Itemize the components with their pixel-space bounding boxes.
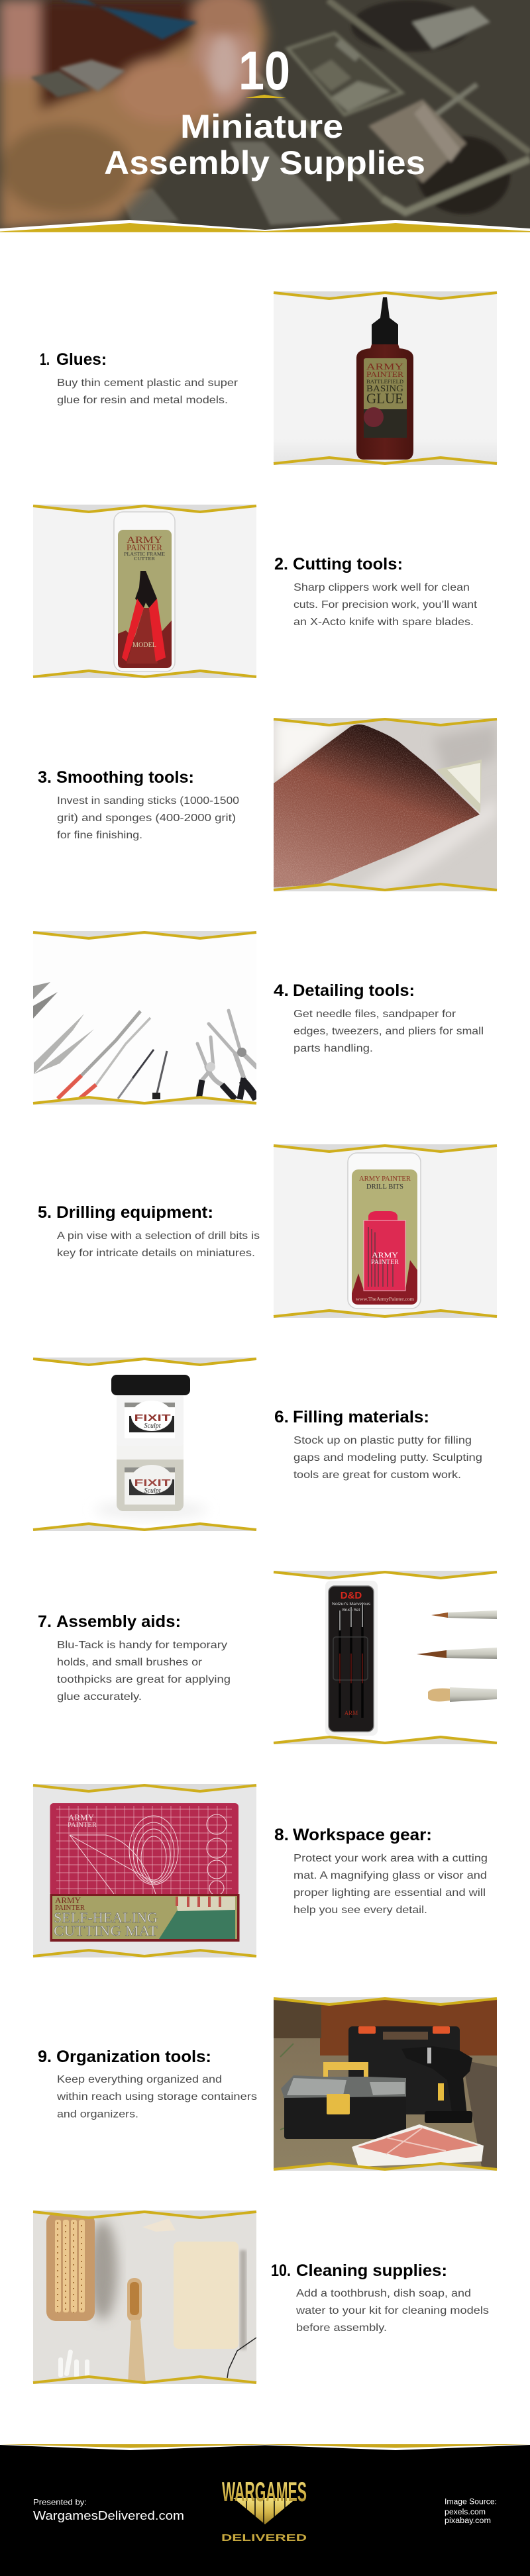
item 1 text: Glues [40,350,238,406]
item 8 text: Workspace gear: 8. [274,1826,289,1844]
item 9 text: Organization tools: 9. [38,2048,52,2066]
footer band [0,2445,530,2576]
item 4 text: Detailing tools: edges, tweezers, and pliers for small [293,1026,484,1037]
item 7 text: Assembly aids: toothpicks are great for applying [57,1674,231,1685]
item 5 image: drill bits package: www.TheArmyPainter.com [356,1297,415,1302]
item 10 text: Cleaning supplies: Add a toothbrush, dish soap, and [296,2288,471,2299]
item 9 text: Organization tools: Keep everything organized and [57,2074,222,2085]
item 1 image: basing glue bottle: BATTLEFIELD [366,379,403,385]
item 5 text: Drilling equipment: 5. [38,1203,52,1222]
item 8 image: cutting mat: SELF-HEALING [54,1909,158,1926]
item 8 text: Workspace gear: mat. A magnifying glass or visor and [293,1870,487,1881]
item 8 image: cutting mat: PAINTER [68,1822,97,1829]
item 10 image: brush, toothbrush and soap [33,2210,256,2384]
item 8 text: Workspace gear: proper lighting are essential and will [293,1887,486,1899]
item 1 image: basing glue bottle: GLUE [366,390,403,407]
item 1 text: Glues: Glues: [56,350,107,369]
item 5 image: drill bits package: DRILL BITS [366,1183,403,1191]
item 10 text: Cleaning supplies: 10. [271,2261,291,2280]
item 6 image: sculpting putty jars: FIXIT [134,1477,171,1489]
footer logo: Wargames Delivered [221,2476,307,2544]
item 6 text: Filling materials: 6. [274,1408,289,1426]
item 7 text: Assembly aids: holds, and small brushes or [57,1657,203,1668]
item 9 text: Organization tools [38,2048,257,2120]
item 9 text: Organization tools: within reach using storage containers [56,2091,257,2103]
title: Miniature Assembly Supplies [104,108,425,181]
footer chevron edge [0,2444,530,2448]
item 10 text: Cleaning supplies: before assembly. [296,2322,387,2334]
item 8 image: cutting mat [33,1784,256,1957]
item 4 text: Detailing tools: Get needle files, sandpaper for [293,1009,456,1020]
footer credit: presented by: Presented by: [33,2498,87,2507]
header banner photo [0,0,530,234]
item 10 text: Cleaning supplies: water to your kit for cleaning models [295,2305,489,2316]
item 7 image: brush set: Brush Set [343,1609,360,1612]
item 1 text: Glues: 1. [40,350,50,369]
item 8 text: Workspace gear: help you see every detail. [293,1905,427,1916]
item 2 image: plastic frame cutter [33,505,256,678]
item 2 image: plastic frame cutter: ARMY [127,535,162,546]
item 6 image: sculpting putty jars: FIXIT [134,1412,171,1424]
item 2 image: plastic frame cutter: CUTTER [134,556,155,562]
item 1 image: basing glue bottle: ARMY [366,362,403,372]
item 3 text: Smoothing tools: grit) and sponges (400-2000 grit) [57,813,236,824]
item 5 text: Drilling equipment: Drilling equipment: [56,1203,213,1222]
item 9 image: toolboxes and drill [274,1997,497,2171]
item 3 text: Smoothing tools [38,768,239,841]
item 4 image: detailing tools [33,931,256,1105]
item 2 text: Cutting tools: Cutting tools: [293,555,403,573]
header chevron edge [0,220,530,233]
item 5 image: drill bits package: ARMY PAINTER [359,1175,411,1183]
item 6 text: Filling materials [274,1408,482,1481]
item 8 text: Workspace gear [274,1826,488,1916]
item 6 text: Filling materials: tools are great for custom work. [293,1469,461,1481]
title accent chevron [245,95,286,98]
footer logo: Wargames Delivered: WARGAMES [222,2476,307,2507]
footer credit: presented by: WargamesDelivered.com [33,2508,184,2522]
item 5 image: drill bits package: ARMY [372,1250,398,1260]
item 7 text: Assembly aids: 7. [38,1612,52,1631]
item 1 image: basing glue bottle [274,291,497,465]
item 2 text: Cutting tools: cuts. For precision work, you’ll want [293,599,478,611]
item 3 text: Smoothing tools: Invest in sanding sticks (1000-1500 [57,795,239,807]
item 1 text: Glues: Buy thin cement plastic and super [57,377,238,389]
item 4 text: Detailing tools: 4. [274,981,289,1000]
item 4 text: Detailing tools: Detailing tools: [293,981,415,1000]
footer image sources: pixabay.com [445,2517,491,2525]
item 2 text: Cutting tools: an X-Acto knife with spare blades. [293,617,474,628]
item 3 image: sandpaper [274,718,497,891]
item 3 text: Smoothing tools: Smoothing tools: [56,768,194,787]
item 7 image: brush set: D&D [341,1590,362,1601]
item 6 text: Filling materials: Filling materials: [293,1408,429,1426]
item 2 text: Cutting tools: Sharp clippers work well for clean [293,582,470,593]
footer credit: presented by [33,2498,184,2522]
title: Miniature Assembly Supplies: Assembly Supplies [104,144,425,181]
item 3 text: Smoothing tools: 3. [38,768,52,787]
item 1 text: Glues: glue for resin and metal models. [57,395,228,406]
item 8 image: cutting mat: ARMY [55,1895,81,1905]
item 5 text: Drilling equipment [38,1203,260,1259]
item 7 image: brush set: ARM [344,1710,358,1716]
title: Miniature Assembly Supplies: Miniature [180,108,343,145]
item 7 text: Assembly aids: Blu-Tack is handy for temporary [57,1640,227,1651]
footer logo: Wargames Delivered: DELIVERED [221,2533,307,2544]
item 6 text: Filling materials: Stock up on plastic putty for filling [293,1435,472,1446]
item 2 image: plastic frame cutter: MODEL [132,642,156,649]
footer image sources [445,2498,497,2525]
item 6 image: sculpting putty jars: Sculpt [144,1487,161,1495]
footer image sources: Image Source: [445,2498,497,2506]
item 1 image: basing glue bottle: BASING [366,384,403,394]
item 8 image: cutting mat: ARMY [68,1812,95,1822]
item 5 image: drill bits package: PAINTER [371,1259,399,1266]
footer image sources: pexels.com [445,2508,486,2516]
item 8 text: Workspace gear: Protect your work area with a cutting [293,1853,488,1864]
item 10 text: Cleaning supplies [271,2261,489,2334]
item 8 image: cutting mat: PAINTER [55,1905,85,1912]
item 6 text: Filling materials: gaps and modeling putty. Sculpting [293,1452,482,1463]
item 10 text: Cleaning supplies: Cleaning supplies: [296,2261,447,2280]
item 4 text: Detailing tools [274,981,484,1054]
item 7 text: Assembly aids: Assembly aids: [56,1612,181,1631]
item 1 image: basing glue bottle: PAINTER [366,370,403,379]
item 2 text: Cutting tools: 2. [274,555,288,573]
item 9 text: Organization tools: and organizers. [57,2108,138,2120]
item 7 text: Assembly aids [38,1612,231,1703]
item 6 image: sculpting putty jars: Sculpt [144,1422,161,1430]
item 2 image: plastic frame cutter: PAINTER [127,542,162,552]
item 6 image: sculpting putty jars [33,1358,256,1531]
title: 10: 10 [238,40,290,101]
item 2 image: plastic frame cutter: PLASTIC FRAME [124,552,165,557]
item 5 text: Drilling equipment: A pin vise with a selection of drill bits is [57,1230,260,1242]
item 5 text: Drilling equipment: key for intricate details on miniatures. [57,1248,255,1259]
item 8 text: Workspace gear: Workspace gear: [293,1826,432,1844]
item 7 text: Assembly aids: glue accurately. [57,1691,142,1703]
item 7 image: brush set [274,1571,497,1744]
item 4 text: Detailing tools: parts handling. [293,1043,373,1054]
item 2 text: Cutting tools [274,555,478,628]
item 8 image: cutting mat: CUTTING MAT [54,1922,158,1939]
item 7 image: brush set: Nolzur's Marvelous [332,1603,370,1607]
item 3 text: Smoothing tools: for fine finishing. [57,830,142,841]
item 9 text: Organization tools: Organization tools: [56,2048,211,2066]
item 5 image: drill bits package [274,1144,497,1318]
